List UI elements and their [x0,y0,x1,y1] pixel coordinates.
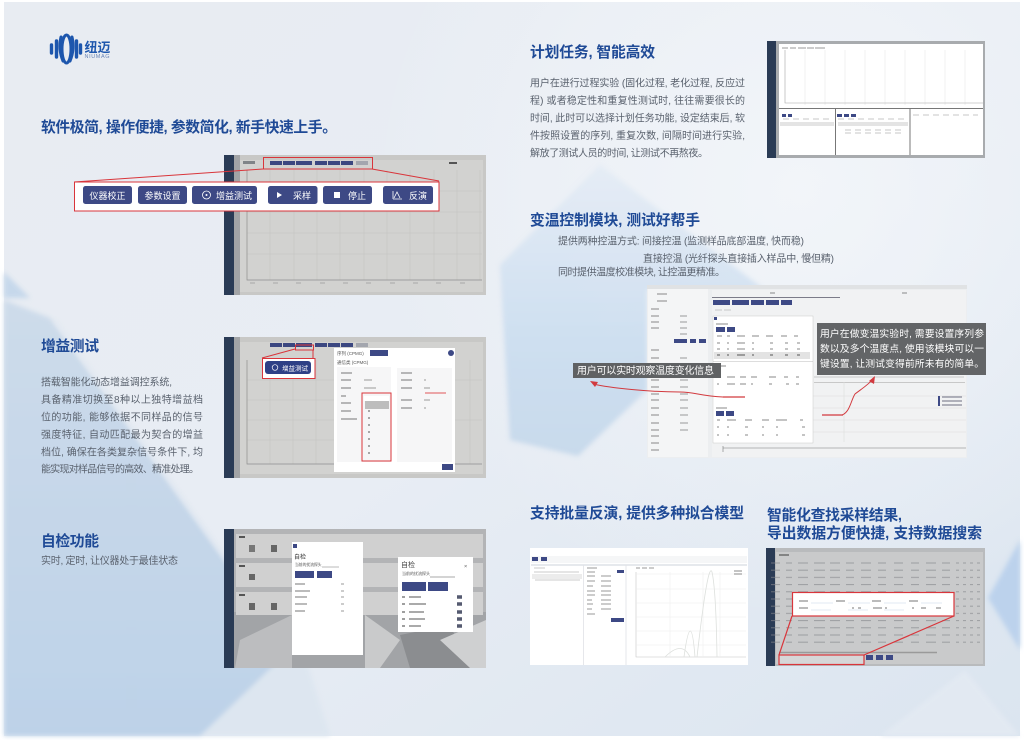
screenshot: search results table [766,548,985,666]
heading: scheduled tasks: 计划任务, 智能高效 [530,43,655,61]
icon: wave logo mark [52,35,80,63]
text block: temperature control description: 直接控温 (光纤探头直接插入样品中, 慢但精) [643,252,834,265]
text block: scheduled tasks description [530,76,745,160]
logo [52,35,110,63]
right charts [712,290,966,457]
text block: self check description: 实时, 定时, 让仪器处于最佳状态 [41,554,178,567]
heading: software simplicity: 软件极简, 操作便捷, 参数简化, 新手快速上手。 [41,118,337,136]
dialog: temperature table [713,316,813,443]
arrow: to temperature info [590,381,745,397]
left parameter panel [648,289,708,457]
callout: gain test button [262,358,315,378]
text block: gain test description: 具备精准切换至8种以上独特增益档 [41,393,203,406]
text block: gain test description: 位的功能, 能够依据不同样品的信号 [41,410,203,424]
callout: self check items: 自检 [401,560,415,569]
callout: temperature info: 用户可以实时观察温度变化信息 [577,364,714,377]
heading: search sampling results: 导出数据方便快捷, 支持数据搜索 [767,524,982,542]
text block: gain test description: 搭载智能化动态增益调控系统, [41,376,172,388]
text block: scheduled tasks description: 程) 或者稳定性和重复性测试时, 往往需要很长的 [530,94,745,107]
highlight: gain test toolbar link [262,345,314,358]
heading: search sampling results: 智能化查找采样结果, [767,506,902,524]
screenshot: gain test window [224,337,486,478]
callout: self check items: × [464,564,467,570]
text block: temperature control description [558,234,834,278]
screenshot: main software window with toolbar callout [74,155,486,295]
dialog: self check base: 自检 [294,553,306,561]
callout: one-click settings [817,323,986,375]
text block: gain test description [41,376,203,476]
text block: temperature control description: 同时提供温度校准模块, 让控温更精准。 [558,266,725,278]
logo: 纽迈 [84,40,110,55]
text block: gain test description: 档位, 确保在各类复杂信号条件下, 均 [41,446,203,458]
heading: search sampling results [767,506,982,542]
dialog: sequence parameters [334,348,455,472]
screenshot: scheduled tasks window [767,41,985,158]
dialog: self check base: 当前的扰流探头 [295,562,322,567]
text block: scheduled tasks description: 解放了测试人员的时间, 让测试不再熬夜。 [530,146,708,160]
callout: toolbar buttons: 参数设置 [144,190,181,201]
callout: toolbar buttons: 采样 [293,190,311,201]
callout: search fields [792,592,954,616]
dialog: sequence parameters: 序列 (CPMG) [337,350,364,357]
toolbar highlight [264,158,372,169]
callout: self check items [398,557,473,632]
screenshot: self-check window [224,529,486,668]
callout: temperature info [573,363,721,378]
heading: batch inversion: 支持批量反演, 提供多种拟合模型 [530,504,744,522]
callout: toolbar buttons: 仪器校正 [89,190,126,201]
callout: gain test button: 增益测试 [282,364,308,372]
text block: scheduled tasks description: 用户在进行过程实验 (固化过程, 老化过程, 反应过 [530,76,745,90]
arrow: to one-click settings [822,376,875,415]
callout: toolbar buttons: 反演 [409,190,427,201]
callout: self check items: 当前的扰流探头 [402,570,430,576]
callout: toolbar buttons: 停止 [348,190,366,201]
screenshot: temperature control window [647,285,967,458]
text block: scheduled tasks description: 件按照设置的序列, 重复次数, 间隔时间进行实验, [530,129,745,142]
text block: temperature control description: 提供两种控温方式: 间接控温 (监测样品底部温度, 快而稳) [558,234,804,248]
callout: toolbar buttons [74,182,439,211]
dialog: self check base [292,542,363,655]
highlight: gain dropdown [362,393,391,461]
callout: one-click settings: 用户在做变温实验时, 需要设置序列参 [820,327,984,340]
heading: gain test: 增益测试 [41,337,99,355]
callout: one-click settings: 数以及多个温度点, 使用该模块可以一 [820,342,984,355]
text block: gain test description: 强度特征, 自动匹配最为契合的增益 [41,428,203,441]
dialog: sequence parameters: 通信类 (CPMG) [337,359,369,366]
text block: gain test description: 能实现对样品信号的高效、精准处理。 [41,462,199,476]
heading: temperature control module: 变温控制模块, 测试好帮手 [530,211,700,229]
callout: one-click settings: 键设置, 让测试变得前所未有的简单。 [820,357,984,370]
logo: NIUMAG [84,54,110,60]
heading: self check: 自检功能 [41,532,99,550]
text block: scheduled tasks description: 时间, 此时可以选择计划任务功能, 设定结束后, 软 [530,112,745,124]
highlight: search field area [779,655,864,664]
callout: toolbar buttons: 增益测试 [216,190,252,201]
screenshot: batch inversion window [530,548,748,665]
chart: fitted curves [665,571,717,657]
